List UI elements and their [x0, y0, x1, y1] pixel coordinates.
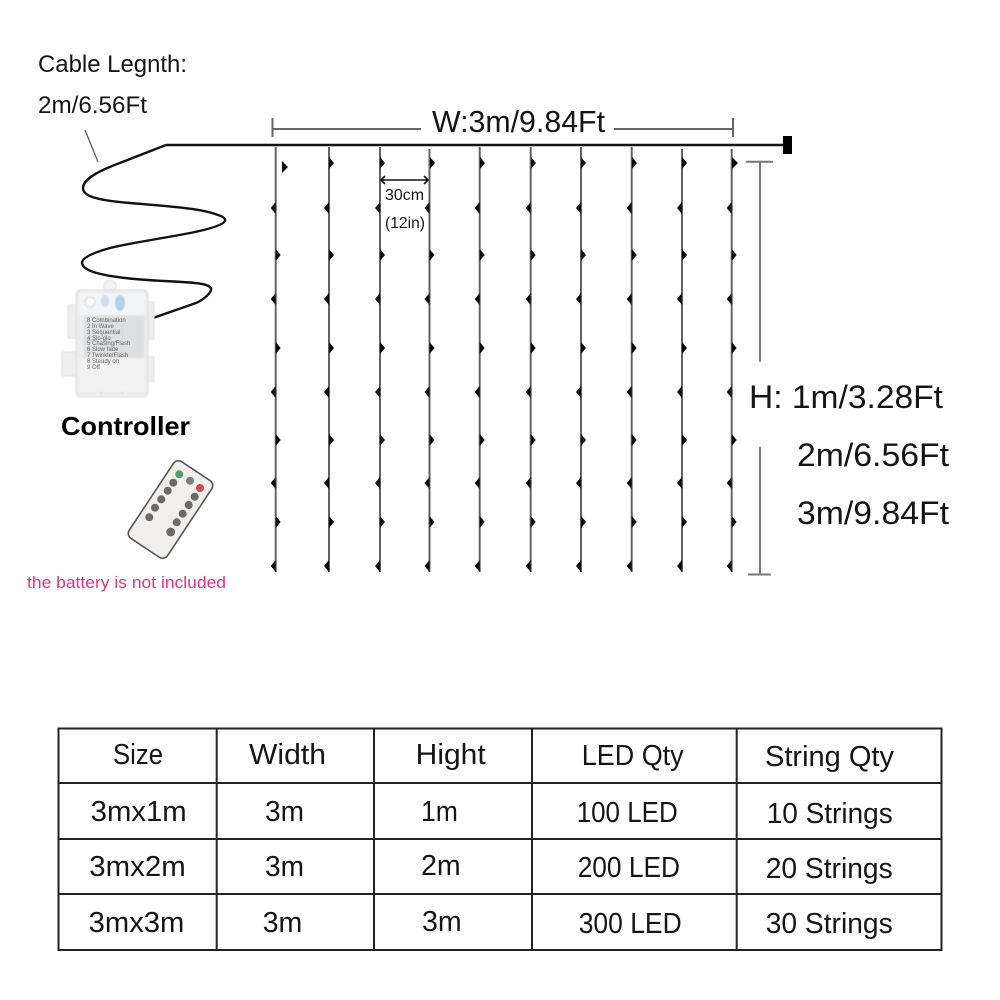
power buttons [175, 470, 183, 478]
height values: H: 1m/3.28Ft [749, 379, 943, 415]
specification table [58, 728, 942, 950]
wire end plug [783, 136, 792, 154]
row 3mx3m: 300 LED [579, 908, 682, 940]
table header: Hight [416, 739, 486, 771]
string 7 [576, 147, 586, 572]
row 3mx1m: 3mx1m [91, 796, 187, 828]
string 2 [324, 147, 334, 572]
row 3mx1m: 10 Strings [767, 798, 893, 830]
string 10 [727, 149, 738, 572]
table header [113, 739, 894, 773]
table grid [58, 728, 942, 950]
row 3mx3m: 30 Strings [766, 908, 893, 940]
controller mode list: 8 Steady on [87, 359, 119, 365]
controller mode list: 3 Sequential [87, 330, 120, 336]
row 3mx1m: 1m [421, 796, 458, 828]
row 3mx1m: 3m [265, 796, 304, 828]
controller mode list: 9 Off [87, 365, 100, 371]
cable length label [38, 51, 187, 119]
string 3 [375, 147, 385, 572]
string 6 [526, 147, 536, 572]
remote control [126, 458, 215, 561]
height dimension line [746, 162, 773, 574]
row 3mx1m [91, 796, 893, 830]
string spacing callout: (12in) [385, 215, 425, 232]
string 8 [627, 147, 637, 572]
row 3mx2m: 200 LED [578, 852, 680, 884]
table header: Size [113, 739, 163, 771]
string spacing callout: 30cm [385, 187, 424, 204]
width dimension: W:3m/9.84Ft [432, 104, 605, 139]
controller mode list: 5 Chasing/Flash [87, 341, 130, 347]
height values [749, 379, 949, 531]
controller label: Controller [61, 411, 190, 441]
controller mode list: 2 In Wave [87, 324, 114, 330]
coiled controller cable [82, 145, 225, 318]
height values: 2m/6.56Ft [797, 437, 949, 473]
main horizontal wire [166, 144, 786, 146]
curtain light strings [271, 147, 738, 572]
row 3mx3m: 3m [422, 906, 462, 938]
battery controller box [62, 280, 154, 397]
battery note: the battery is not included [27, 573, 226, 592]
row 3mx2m [89, 850, 893, 885]
row 3mx2m: 2m [421, 850, 461, 882]
table header: String Qty [765, 741, 894, 773]
controller mode list: 4 Slo-glo [87, 336, 111, 342]
string spacing callout [381, 176, 428, 232]
cable length label: 2m/6.56Ft [38, 92, 147, 119]
row 3mx2m: 3m [265, 851, 304, 883]
row 3mx2m: 3mx2m [89, 851, 186, 883]
table header: Width [249, 739, 326, 771]
row 3mx3m: 3m [263, 907, 302, 939]
cable length label: Cable Legnth: [38, 51, 187, 78]
controller mode list: 6 Slow fade [87, 347, 119, 353]
width dimension [272, 104, 733, 139]
cable leader line [85, 130, 98, 162]
row 3mx3m [89, 906, 893, 940]
height values: 3m/9.84Ft [797, 495, 949, 531]
row 3mx2m: 20 Strings [766, 853, 893, 885]
controller mode list [87, 318, 130, 371]
row 3mx3m: 3mx3m [89, 907, 184, 939]
controller mode list: 7 Twinkle/Flash [87, 353, 128, 359]
string 4 [424, 149, 435, 572]
function buttons [145, 479, 199, 536]
row 3mx1m: 100 LED [577, 797, 678, 829]
string 9 [677, 149, 687, 572]
string 1 [271, 147, 288, 572]
table header: LED Qty [582, 740, 684, 772]
controller mode list: 8 Combination [87, 318, 126, 324]
string 5 [475, 147, 485, 572]
